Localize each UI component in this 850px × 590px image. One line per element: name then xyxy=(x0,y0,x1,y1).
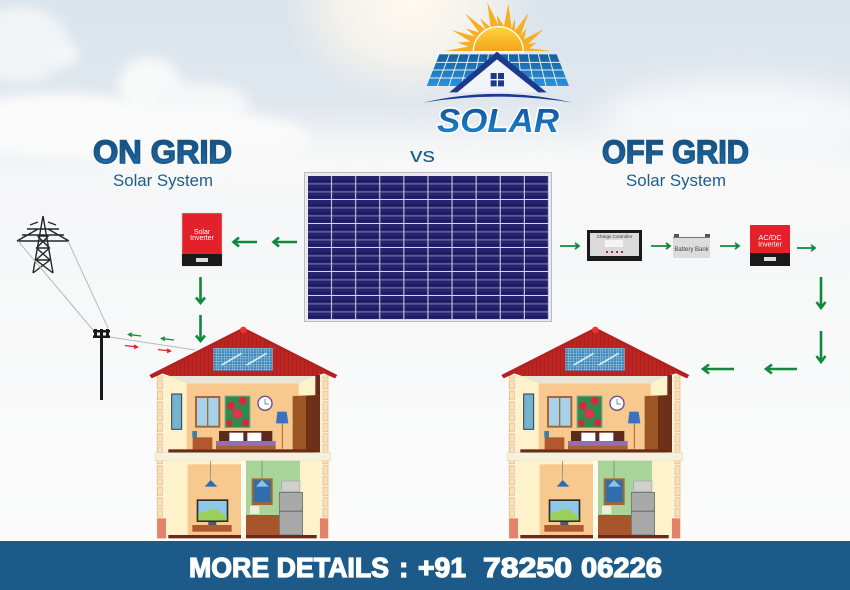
grid exchange arrows xyxy=(125,333,174,352)
off grid AC/DC inverter: Inverter xyxy=(758,242,783,248)
logo wordmark: SOLAR xyxy=(437,102,559,139)
on grid inverter: Inverter xyxy=(190,235,215,242)
off grid flow arrows xyxy=(560,243,826,374)
heading: on grid: Solar System xyxy=(113,171,213,190)
solar panel xyxy=(304,172,552,322)
off grid AC/DC inverter xyxy=(750,225,790,266)
rooftop solar panel xyxy=(213,348,273,371)
footer bar: 06226 xyxy=(581,552,662,583)
heading: off grid: Solar System xyxy=(626,171,726,190)
house: on grid xyxy=(149,327,337,538)
footer bar: : xyxy=(399,552,408,583)
footer bar: +91 xyxy=(418,552,466,583)
heading: on grid xyxy=(93,134,232,190)
heading: on grid: ON GRID xyxy=(93,134,232,170)
utility pole xyxy=(93,329,110,400)
footer bar: MORE DETAILS xyxy=(189,552,389,583)
lower floor rooms xyxy=(166,461,320,538)
off grid charge controller: Charge Controller xyxy=(597,234,633,239)
vs label: vs xyxy=(410,145,435,167)
heading: off grid: OFF GRID xyxy=(602,134,749,170)
on grid inverter: Solar xyxy=(194,229,211,236)
brick columns xyxy=(156,375,329,538)
floor band xyxy=(155,453,331,461)
roof xyxy=(149,327,337,378)
upper floor room xyxy=(166,375,320,453)
footer bar: 78250 xyxy=(483,552,572,583)
heading: off grid xyxy=(602,134,749,190)
off grid battery bank xyxy=(673,234,710,258)
logo sun and panels xyxy=(423,3,573,103)
house: off grid xyxy=(501,327,689,538)
power lines xyxy=(18,241,195,350)
footer bar xyxy=(0,541,850,590)
logo: Solar xyxy=(423,3,573,139)
off grid battery bank: Battery Bank xyxy=(674,247,710,253)
on grid flow arrows xyxy=(196,238,297,341)
off grid AC/DC inverter: AC/DC xyxy=(758,233,782,242)
off grid charge controller xyxy=(587,230,642,261)
on grid inverter xyxy=(182,213,222,266)
transmission tower xyxy=(17,216,69,273)
